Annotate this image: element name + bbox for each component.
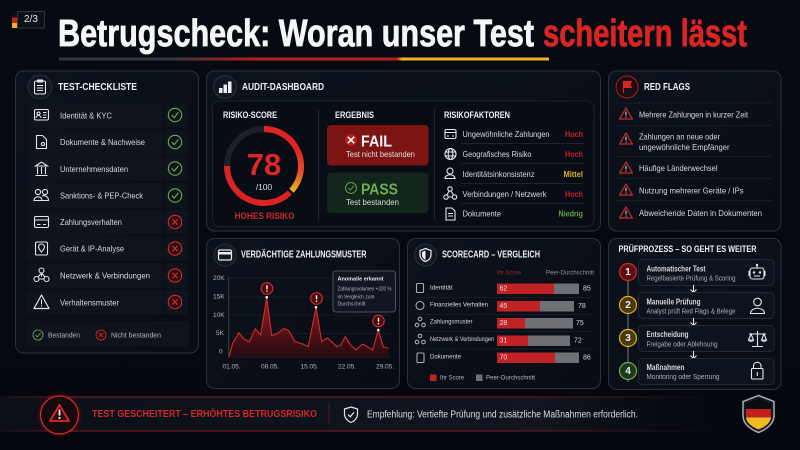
step 1: Regelbasierte Prüfung & Scoring [646, 274, 736, 282]
step 2: 2 [625, 300, 631, 311]
row: Gerät: Gerät & IP-Analyse [60, 244, 124, 254]
row: Netzwerk: Netzwerk & Verbindungen [430, 336, 494, 343]
warning icon [40, 396, 78, 434]
factor: documents: Niedrig [558, 208, 583, 218]
row: Dokumente: Dokumente [430, 354, 461, 360]
line chart: 29.05. [376, 364, 394, 370]
step 2: Analyst prüft Red Flags & Belege [646, 306, 736, 316]
risk score gauge: /100 [256, 182, 273, 192]
risk score gauge: 78 [247, 147, 281, 182]
flag 2: Zahlungen an neue oder [639, 132, 720, 142]
line chart: 10K [213, 312, 225, 319]
flag 1: Mehrere Zahlungen in kurzer Zeit [639, 110, 749, 120]
row: Dokumente: Dokumente & Nachweise [60, 137, 145, 147]
row: Sanktionen [34, 189, 182, 202]
flag 2: ungewöhnliche Empfänger [639, 142, 730, 152]
page badge: 2/3 [24, 14, 38, 25]
row: Zahlungsmuster: 28 [500, 320, 507, 327]
row: Netzwerk: 72 [574, 338, 582, 344]
arrow [690, 318, 696, 326]
factor: payments: Hoch [565, 129, 583, 139]
step 4: 4 [625, 366, 631, 377]
factor: geo: Hoch [565, 149, 583, 159]
shield icon [414, 244, 436, 266]
flag 4 [620, 184, 744, 196]
checklist icon [28, 75, 52, 99]
row: Dokumente [36, 135, 182, 149]
row: Finanzielles Verhalten [416, 301, 586, 312]
fail box: FAIL [361, 134, 392, 150]
column headers: Peer-Durchschnitt [546, 270, 594, 276]
flag 1 [620, 108, 749, 120]
row: Verhaltensmuster: Verhaltensmuster [60, 298, 119, 308]
anomaly callout [333, 271, 396, 312]
anomaly callout: im Vergleich zum [338, 294, 374, 300]
result column [327, 110, 428, 213]
factor: network [444, 187, 583, 199]
row: Identität: Identität [430, 284, 453, 292]
factor: identity [445, 168, 583, 179]
factor: payments: Ungewöhnliche Zahlungen [462, 129, 550, 139]
scorecard legend [430, 374, 535, 382]
step 3: Freigabe oder Ablehnung [646, 340, 718, 348]
line chart: 08.05. [261, 364, 279, 370]
row: Finanzielles Verhalten: 45 [500, 303, 507, 310]
panel: red flags [608, 71, 781, 231]
german flag shield [743, 396, 774, 432]
panel: review process [608, 238, 781, 390]
scorecard heading: SCORECARD – VERGLEICH [442, 250, 540, 260]
row: Identität: 85 [583, 286, 591, 292]
panel: scorecard [408, 238, 600, 388]
row: Identität: Identität & KYC [60, 110, 112, 120]
line chart: 15.05. [300, 364, 319, 370]
step 2 [620, 292, 774, 318]
step 1: 1 [625, 267, 631, 278]
flag 3: Häufige Länderwechsel [639, 163, 718, 173]
risk factors [444, 110, 584, 220]
risk score gauge: HOHES RISIKO [234, 211, 294, 221]
flag 3 [620, 162, 718, 173]
red flag icon [616, 76, 638, 98]
step 4: Monitoring oder Sperrung [646, 372, 720, 381]
dashboard icon [214, 76, 236, 98]
checklist legend: Nicht bestanden [111, 330, 161, 340]
title: Betrugscheck: Woran unser Test [58, 13, 534, 55]
row: Zahlungsmuster [415, 317, 584, 328]
anomaly callout: Zahlungsvolumen +320 % [338, 286, 392, 292]
row: Dokumente: 70 [500, 354, 507, 362]
process heading: PRÜFPROZESS – SO GEHT ES WEITER [618, 244, 757, 254]
row: Zahlungsmuster: Zahlungsmuster [430, 318, 473, 326]
row: Finanzielles Verhalten: Finanzielles Verhalten [430, 302, 488, 308]
row: Zahlungsverhalten [34, 215, 182, 229]
flag 2 [620, 132, 730, 152]
dashboard heading: AUDIT-DASHBOARD [242, 82, 324, 93]
factor: geo [445, 148, 583, 160]
chart heading: VERDÄCHTIGE ZAHLUNGSMUSTER [241, 248, 367, 260]
step 1 [620, 260, 774, 286]
row: Sanktionen: Sanktions- & PEP-Check [60, 190, 144, 200]
checklist legend [27, 321, 189, 346]
red flags heading: RED FLAGS [644, 82, 690, 93]
row: Verhaltensmuster [34, 295, 182, 309]
flag 5: Abweichende Daten in Dokumenten [639, 208, 762, 218]
step 3: 3 [625, 333, 631, 344]
row: Identität: 62 [500, 286, 507, 292]
panel: suspicious payment patterns [206, 238, 400, 388]
step 3: Entscheidung [646, 329, 688, 339]
factor: network: Verbindungen / Netzwerk [462, 189, 547, 199]
line chart: 0 [219, 348, 223, 356]
risk score gauge [223, 110, 301, 221]
pass box: PASS [361, 182, 398, 198]
result column: ERGEBNIS [335, 110, 374, 120]
risk score gauge: RISIKO-SCORE [223, 110, 277, 120]
flag 4: Nutzung mehrerer Geräte / IPs [639, 186, 744, 196]
factor: identity: Identitätsinkonsistenz [462, 169, 534, 179]
row: Gerät [36, 242, 182, 255]
line chart [213, 275, 394, 370]
factor: network: Hoch [565, 189, 583, 199]
fail box: Test nicht bestanden [346, 149, 415, 159]
line chart: 22.05. [338, 364, 356, 370]
row: Identität [34, 108, 182, 122]
arrow [690, 285, 696, 292]
step 2: Manuelle Prüfung [646, 296, 700, 306]
card icon [214, 244, 236, 266]
checklist legend: Bestanden [48, 330, 80, 340]
step 4: Maßnahmen [646, 362, 684, 372]
scorecard legend: Ihr Score [440, 374, 464, 382]
step 1: Automatischer Test [646, 264, 706, 274]
factor: identity: Mittel [564, 169, 583, 179]
page badge [12, 12, 44, 28]
factor: documents [446, 208, 583, 220]
row backgrounds [27, 103, 188, 314]
row: Unternehmensdaten [36, 162, 182, 176]
factor: documents: Dokumente [462, 208, 501, 218]
row: Netzwerk [34, 268, 182, 282]
checklist heading: TEST-CHECKLISTE [58, 82, 137, 93]
title underline [59, 58, 549, 60]
anomaly callout: Anomalie erkannt [338, 276, 384, 282]
row: Netzwerk [415, 334, 582, 346]
row: Netzwerk: 31 [500, 338, 507, 344]
pass box [327, 172, 428, 213]
panel: test checklist [16, 71, 198, 353]
anomaly callout: Durchschnitt [338, 302, 366, 308]
line chart: 20K [213, 275, 225, 282]
arrow [690, 351, 696, 358]
risk factors: RISIKOFAKTOREN [444, 110, 510, 120]
factor: geo: Geografisches Risiko [462, 149, 532, 159]
row: Netzwerk: Netzwerk & Verbindungen [60, 270, 150, 280]
step 3 [620, 326, 774, 352]
line chart: 5K [216, 330, 225, 337]
row: Dokumente [417, 352, 591, 363]
line chart: 15K [213, 294, 225, 300]
panel: audit dashboard [206, 71, 600, 231]
pass box: Test bestanden [346, 197, 399, 207]
bottom banner [0, 396, 720, 434]
row: Zahlungsmuster: 75 [576, 320, 584, 327]
fail box [327, 125, 428, 166]
line chart: 01.05. [222, 364, 241, 370]
recommendation text: Empfehlung: Vertiefte Prüfung und zusätzliche Maßnahmen erforderlich. [367, 410, 638, 420]
row: Identität [416, 284, 591, 294]
column headers: Ihr Score [497, 270, 521, 276]
row: Dokumente: 86 [583, 354, 591, 362]
recommendation shield icon [344, 407, 358, 422]
row: Zahlungsverhalten: Zahlungsverhalten [60, 217, 122, 227]
warning headline: TEST GESCHEITERT – ERHÖHTES BETRUGSRISIKO [92, 407, 317, 420]
column headers [497, 270, 594, 276]
row: Finanzielles Verhalten: 78 [578, 303, 586, 310]
step 4 [620, 358, 774, 384]
scorecard legend: Peer-Durchschnitt [486, 374, 535, 382]
row: Unternehmensdaten: Unternehmensdaten [60, 164, 128, 174]
